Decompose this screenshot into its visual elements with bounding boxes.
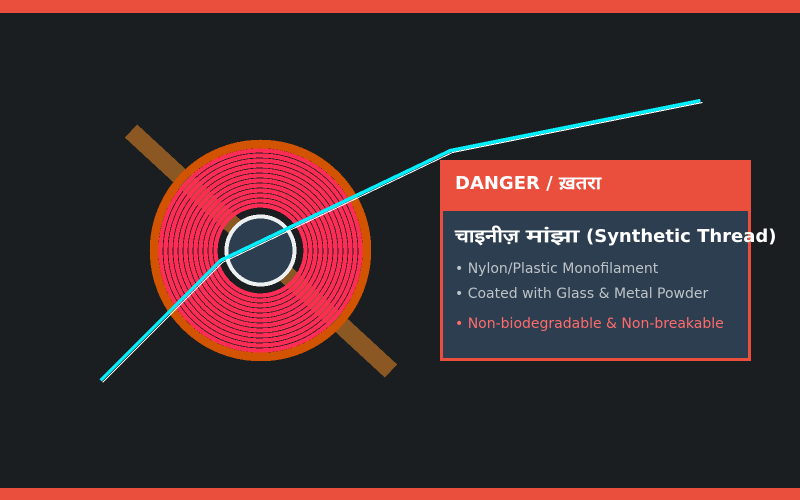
bullet: material: • Nylon/Plastic Monofilament [455,261,659,277]
panel heading: DANGER / [455,173,553,194]
thread title: चाइनीज़ [454,225,520,247]
panel border [440,160,751,361]
wound thread rings [160,150,360,350]
rod through spool body [179,174,342,326]
bullet: coating: • Coated with Glass & Metal Powder [455,286,709,302]
white thread highlight [102,102,702,382]
spool centre hub [226,216,294,284]
spool handle rod [131,131,391,371]
thread line [100,100,702,382]
spool illustration [131,131,391,371]
cyan thread [100,100,700,380]
panel body [443,211,748,358]
top bar [0,0,800,13]
thread title: (Synthetic Thread) [586,226,777,247]
spool outer rim [154,144,367,357]
bottom bar [0,488,800,500]
bullet: warning: • Non-biodegradable & Non-breakable [455,316,724,332]
danger panel [440,160,777,361]
thread title: मांझा [524,226,581,247]
panel heading: ख़तरा [558,173,603,194]
